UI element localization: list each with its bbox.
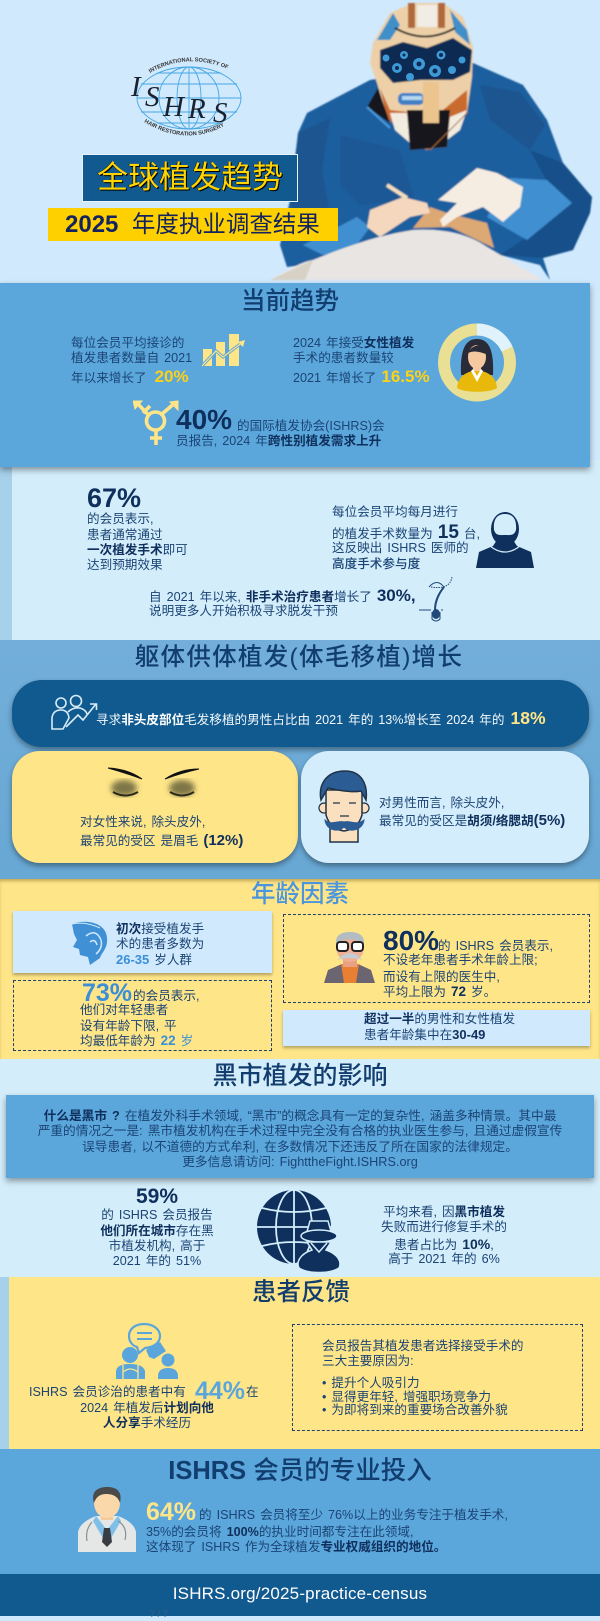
text: 他们对年轻患者 <box>80 1003 168 1017</box>
stat: 64% dedicated <box>146 1498 508 1554</box>
card: male beard <box>301 751 589 863</box>
icon: older man with glasses <box>324 932 375 983</box>
icon: donut with woman <box>438 324 516 402</box>
logo: ISHRS globe: INTERNATIONAL SOCIETY OF <box>148 57 229 73</box>
stat: 15 surgeries per month <box>332 505 480 571</box>
heading: 当前趋势 <box>241 288 339 315</box>
text: 80% <box>383 925 439 956</box>
panel: 黑市植发的影响 <box>0 1059 600 1277</box>
heading: 黑市植发的影响 <box>212 1062 388 1090</box>
stat: patients up 20%: 年以来增长了 20% <box>71 367 189 386</box>
illustration: surgeon performing procedure <box>270 2 593 280</box>
illustration: closed eyes <box>108 768 200 798</box>
text: 对女性来说, 除头皮外, <box>80 815 205 829</box>
stat: 59% black market clinics <box>100 1185 214 1268</box>
page number: 7 / 7 <box>150 1609 168 1619</box>
box: top three reasons: • 为即将到来的重要场合改善外貌 <box>322 1403 508 1417</box>
box: 80% no upper age limit <box>283 914 590 1003</box>
text: 26-35 岁人群 <box>116 952 192 967</box>
stat: 40% transgender demand <box>176 404 385 448</box>
heading: ISHRS 会员的专业投入 <box>168 1457 432 1485</box>
callout: 18% non-scalp <box>12 680 589 747</box>
panel: 年龄因素 <box>0 879 600 1059</box>
stat: 40% transgender demand: 员报告, 2024 年跨性别植发需求上升 <box>176 434 381 448</box>
box: top three reasons <box>292 1324 583 1431</box>
stat: 10% revision surgery <box>381 1205 507 1266</box>
text: 术的患者多数为 <box>116 937 204 951</box>
panel: 躯体供体植发 <box>0 640 600 879</box>
text <box>383 925 553 999</box>
stat: 59% black market clinics: 的 ISHRS 会员报告 <box>101 1208 213 1222</box>
title: 全球植发趋势 <box>83 155 297 201</box>
stat: 64% dedicated: 这体现了 ISHRS 作为全球植发专业权威组织的地位。 <box>146 1540 446 1554</box>
stat: non-surgical patients up 30%: 自 2021 年以来, 非手术治疗患者增长了 30%, <box>149 586 416 605</box>
title: 全球植发趋势: 全球植发趋势 <box>97 160 283 195</box>
heading: 年龄因素 <box>251 881 349 908</box>
icon: man with moustache <box>318 770 370 843</box>
text: 不设老年患者手术年龄上限; <box>383 953 538 967</box>
heading: 躯体供体植发(体毛移植)增长 <box>135 644 463 671</box>
text: 的 ISHRS 会员表示, <box>438 939 553 953</box>
text: 平均上限为 72 岁。 <box>383 984 496 999</box>
text: 均最低年龄为 22 岁 <box>80 1033 193 1048</box>
stat: 67% one session: 患者通常通过 <box>87 528 163 542</box>
stat: 64% dedicated: 的 ISHRS 会员将至少 76%以上的业务专注于植发手术, <box>199 1508 508 1522</box>
stat: patients up 20%: 植发患者数量自 2021 <box>71 351 192 365</box>
stat: 59% black market clinics: 2021 年的 51% <box>113 1254 201 1268</box>
panel: ISHRS 会员的专业投入 <box>0 1449 600 1574</box>
stat: female patients up 16.5%: 手术的患者数量较 <box>293 351 394 365</box>
icon: globe with masked figure <box>257 1190 340 1272</box>
stat: 44% plan to share: 在 <box>246 1385 259 1399</box>
box: top three reasons: 三大主要原因为: <box>322 1354 414 1368</box>
stat: 10% revision surgery: 失败而进行修复手术的 <box>381 1220 507 1234</box>
stat: patients up 20% <box>71 336 192 386</box>
text <box>80 979 199 1048</box>
box: top three reasons: • 显得更年轻, 增强职场竞争力 <box>322 1390 491 1404</box>
text: 而设有上限的医生中, <box>383 970 500 984</box>
box: 73% no lower age limit <box>13 980 272 1051</box>
callout: what is black market: 什么是黑市 ? 在植发外科手术领域, “黑市”的概念具有一定的复杂性, 涵盖多种情景。其中最 <box>44 1109 556 1123</box>
callout: what is black market: 更多信息请访问: FighttheFight.ISHRS.org <box>182 1155 418 1169</box>
box: top three reasons: 会员报告其植发患者选择接受手术的 <box>322 1339 524 1353</box>
text: 对男性而言, 除头皮外, <box>379 796 504 810</box>
panel: 当前趋势 <box>0 283 590 467</box>
footer: URL <box>0 1574 600 1616</box>
stat: 40% transgender demand: 的国际植发协会(ISHRS)会 <box>237 419 385 433</box>
stat: 44% plan to share: ISHRS 会员诊治的患者中有 <box>29 1385 186 1399</box>
icon: hair follicle <box>419 576 452 622</box>
heading: 患者反馈 <box>252 1279 350 1306</box>
icon: transgender symbol <box>133 400 178 445</box>
stat: 40% transgender demand: 40% <box>176 404 232 435</box>
panel: 患者反馈 <box>0 1277 600 1449</box>
stat: 64% dedicated: 64% <box>146 1498 196 1526</box>
logo: ISHRS globe <box>130 57 242 136</box>
stat: 44% plan to share: 2024 年植发后计划向他 <box>80 1401 214 1415</box>
text: 的会员表示, <box>133 989 199 1003</box>
stat: 59% black market clinics: 市植发机构, 高于 <box>109 1239 205 1253</box>
stat: female patients up 16.5%: 2021 年增长了 16.5% <box>293 367 430 386</box>
stat: 15 surgeries per month: 高度手术参与度 <box>332 557 420 571</box>
stat: 15 surgeries per month: 的植发手术数量为 15 台, <box>332 522 480 543</box>
card: female eyebrows <box>12 751 298 863</box>
text <box>116 922 204 967</box>
icon: bar chart with arrow <box>202 334 245 366</box>
stat: non-surgical patients up 30% <box>149 586 416 618</box>
subtitle: 2025 年度执业调查结果: 2025 年度执业调查结果 <box>65 211 320 238</box>
icon: doctor with stethoscope <box>78 1487 136 1552</box>
stat: patients up 20%: 每位会员平均接诊的 <box>71 336 184 350</box>
stat: non-surgical patients up 30%: 说明更多人开始积极寻求脱发干预 <box>149 604 338 618</box>
text: 寻求非头皮部位毛发移植的男性占比由 2021 年的 13%增长至 2024 年的 18% <box>96 708 546 728</box>
text: 73% <box>82 979 132 1007</box>
stat: 67% one session: 67% <box>87 483 141 513</box>
text: 最常见的受区 是眉毛 (12%) <box>80 832 243 849</box>
stat: 10% revision surgery: 患者占比为 10%, <box>394 1236 494 1252</box>
stat: female patients up 16.5% <box>293 336 430 386</box>
stat: 10% revision surgery: 平均来看, 因黑市植发 <box>383 1205 505 1219</box>
stat: 67% one session <box>87 483 188 572</box>
stat: 59% black market clinics: 他们所在城市存在黑 <box>100 1224 214 1238</box>
icon: doctor and patient conversation <box>116 1323 178 1379</box>
logo: ISHRS globe: ISHRS <box>130 71 228 129</box>
footer: URL: ISHRS.org/2025-practice-census <box>173 1584 427 1603</box>
text: 初次接受植发手 <box>116 922 204 936</box>
stat: 44% plan to share <box>29 1377 259 1430</box>
header background <box>0 0 600 283</box>
section background: light band <box>0 460 600 640</box>
box: over half aged 30-49: 患者年龄集中在30-49 <box>364 1027 485 1042</box>
stat: 44% plan to share: 44% <box>195 1377 245 1405</box>
callout: what is black market: 误导患者, 以不道德的方式牟利, 在多数情况下还违反了所在国家的法律规定。 <box>82 1140 518 1154</box>
text: 设有年龄下限, 平 <box>80 1019 177 1033</box>
stat: 67% one session: 一次植发手术即可 <box>87 543 188 557</box>
stat: 10% revision surgery: 高于 2021 年的 6% <box>388 1252 500 1266</box>
text <box>379 796 565 829</box>
stat: 59% black market clinics: 59% <box>136 1185 178 1208</box>
stat: 67% one session: 的会员表示, <box>87 512 153 526</box>
stat: 44% plan to share: 人分享手术经历 <box>103 1416 191 1430</box>
logo: ISHRS globe: HAIR RESTORATION SURGERY <box>144 118 223 136</box>
callout: what is black market: 严重的情况之一是: 黑市植发机构在手术过程中完全没有合格的执业医生参与, 且通过虚假宣传 <box>38 1124 562 1138</box>
stat: 67% one session: 达到预期效果 <box>87 558 163 572</box>
box: over half aged 30-49 <box>283 1010 590 1046</box>
box: over half aged 30-49: 超过一半的男性和女性植发 <box>364 1012 515 1026</box>
box: first-time patients age <box>13 911 272 973</box>
icon: head profile <box>72 922 108 965</box>
icon: people with arrow <box>51 694 98 730</box>
stat: 64% dedicated: 35%的会员将 100%的执业时间都专注在此领域, <box>146 1525 413 1539</box>
stat: 15 surgeries per month: 这反映出 ISHRS 医师的 <box>332 541 469 555</box>
box: top three reasons: • 提升个人吸引力 <box>322 1376 420 1390</box>
stat: female patients up 16.5%: 2024 年接受女性植发 <box>293 336 414 350</box>
text <box>80 815 243 849</box>
icon: bald bearded man <box>476 512 534 568</box>
text: 最常见的受区是胡须/络腮胡(5%) <box>379 812 565 829</box>
callout: what is black market <box>6 1095 594 1178</box>
stat: 15 surgeries per month: 每位会员平均每月进行 <box>332 505 458 519</box>
